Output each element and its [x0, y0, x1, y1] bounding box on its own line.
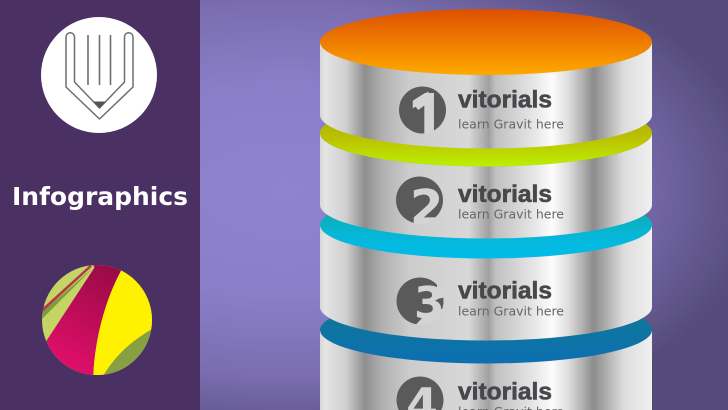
label 1: [458, 86, 564, 132]
label 3: learn Gravit here: [458, 304, 564, 318]
left sidebar panel: [14, 17, 187, 375]
number badge 2: 2: [410, 180, 443, 236]
label 3: [458, 278, 564, 318]
label 4: vitorials: [458, 378, 552, 406]
layer 2 cylinder: [320, 124, 652, 238]
layer 4 cylinder: [320, 318, 652, 410]
number badge 1: [399, 86, 446, 134]
icon: pencil logo in white circle: [41, 17, 157, 133]
heading: Infographics: Infographics: [12, 182, 188, 211]
layer 3 cylinder: [320, 215, 652, 340]
layer 1 cylinder: [320, 9, 652, 156]
icon: Gravit logo: [42, 265, 152, 375]
label 2: [458, 181, 564, 222]
number badge 1: 1: [408, 78, 447, 156]
number badge 3: 3: [414, 278, 445, 329]
label 4: [458, 382, 562, 410]
number badge 3: [396, 278, 444, 324]
number badge 4: [396, 376, 444, 410]
green disc: [320, 100, 652, 166]
blue disc: [320, 318, 652, 364]
cyan disc: [320, 192, 652, 258]
label 3: vitorials: [458, 278, 552, 304]
label 1: vitorials: [458, 86, 552, 114]
orange top disc: [320, 9, 652, 75]
purple background: [200, 0, 728, 410]
label 1: learn Gravit here: [458, 118, 564, 132]
number badge 2: [396, 176, 443, 223]
label 2: learn Gravit here: [458, 208, 564, 222]
label 2: vitorials: [458, 181, 552, 208]
